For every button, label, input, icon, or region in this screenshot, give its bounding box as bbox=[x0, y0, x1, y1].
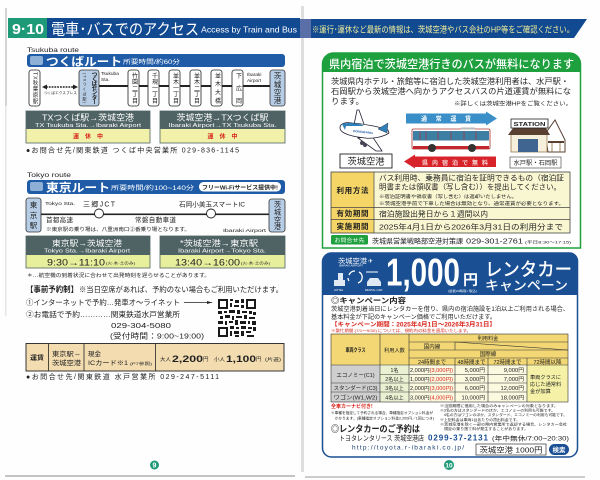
contact: airport office: (平日8:30～17:15) bbox=[525, 240, 572, 244]
header: left page title band bbox=[8, 18, 300, 38]
table: rental prices: 金が加算 bbox=[530, 387, 551, 395]
timetable panel: Tokyo to Ibaraki bbox=[26, 236, 150, 268]
fare table: 大人 bbox=[160, 356, 171, 363]
route diagram: 首都高速 bbox=[46, 215, 74, 224]
campaign banner: 1,000 bbox=[386, 252, 460, 294]
search box: 茨城空港 1000円 bbox=[480, 444, 542, 454]
reservation methods bbox=[26, 297, 212, 340]
panel frame and heading bbox=[322, 53, 581, 248]
reservation methods: ②お電話で予約…………関東鉄道水戸営業所 bbox=[26, 309, 181, 319]
header: left page title band: 電車･バスでのアクセス bbox=[51, 20, 199, 38]
route label: Tokyo route bbox=[27, 172, 71, 179]
campaign banner: レンタカー bbox=[485, 259, 572, 280]
route diagram: Airport bbox=[247, 78, 262, 84]
campaign banner: (最低24時間 / 税込) bbox=[448, 289, 477, 293]
header: left page title band: 9·10 bbox=[12, 21, 44, 38]
table: usage details: 宿泊施設出発日から１週間以内 bbox=[379, 210, 488, 218]
table: rental prices: 4名以上 bbox=[385, 394, 404, 402]
campaign banner: キャンペーン bbox=[485, 278, 568, 293]
table: rental prices: 車両クラス bbox=[346, 346, 366, 354]
timetable panel: Tokyo to Ibaraki: Tokyo Sta.→Ibaraki Airport bbox=[44, 248, 131, 254]
timetable panel: Ibaraki to TX Tsukuba: 運 休 中 bbox=[207, 132, 238, 140]
route diagram: 並木二丁目 bbox=[192, 72, 200, 105]
reservation methods: 029-304-5080 bbox=[111, 321, 171, 330]
section: Tokyo route bbox=[26, 172, 285, 381]
description text bbox=[331, 76, 572, 108]
search box: 検索 bbox=[552, 445, 566, 454]
timetable panel: Tokyo to Ibaraki: 9:30→11:10 bbox=[47, 258, 105, 268]
timetable panel: TX Tsukuba to Ibaraki: TXつくば駅→茨城空港 bbox=[42, 112, 135, 122]
campaign details text bbox=[331, 295, 569, 333]
route diagram: 千現一丁目 bbox=[150, 72, 158, 105]
page number 10: 10 bbox=[445, 462, 453, 470]
route title bar: 所要時間/約100~140分 bbox=[111, 184, 194, 192]
route diagram: つくばエクスプレス bbox=[44, 90, 78, 95]
timetable panel: Tokyo to Ibaraki: 東京駅→茨城空港 bbox=[52, 238, 122, 248]
route diagram: Ibaraki bbox=[247, 72, 261, 78]
timetable panel: Tokyo to Ibaraki: (火·木·土のみ) bbox=[106, 260, 136, 266]
panel frame and heading: 県内宿泊で茨城空港行きのバスが無料になります bbox=[329, 57, 574, 71]
table: rental prices: 2名以上 bbox=[385, 375, 404, 383]
route diagram: ※東京駅の乗り場は、八重洲南口②番乗り場となります。 bbox=[46, 226, 190, 233]
route diagram: 竹園二丁目 bbox=[130, 72, 138, 105]
fare table: ICカード※1 bbox=[88, 359, 128, 367]
table: rental prices: 10,000円 bbox=[461, 394, 485, 402]
table: rental prices: 国際線 bbox=[480, 350, 497, 358]
route diagram: 並木一丁目 bbox=[172, 72, 178, 105]
route diagram bbox=[29, 70, 285, 106]
timetable panel: TX Tsukuba to Ibaraki bbox=[26, 111, 150, 143]
table: usage details: 有効期間 bbox=[336, 208, 368, 218]
fare table: (片道) bbox=[265, 356, 282, 363]
table: rental prices: 9,000円 bbox=[504, 367, 524, 374]
table: rental prices: 3,000円 bbox=[465, 376, 485, 383]
table: rental prices: 応じた通常料 bbox=[530, 380, 561, 388]
fare table: 現金 bbox=[88, 349, 102, 358]
reservation methods: ①インターネットで予約…発車オ～ライネット bbox=[26, 297, 180, 307]
arrow: free with overnight stay: 県内宿泊で無料 bbox=[422, 159, 488, 167]
campaign banner bbox=[322, 252, 578, 295]
contact: Tokyo: ●お問合せ先/関東鉄道 水戸営業所 029-247-5111 bbox=[26, 372, 219, 381]
table: rental prices: 72時間まで bbox=[493, 358, 522, 366]
table: usage details: 2025年4月1日から2026年3月31日の利用分まで bbox=[379, 222, 563, 232]
campaign banner: RENTAL CAR bbox=[365, 288, 382, 292]
table: rental prices: 48時間まで bbox=[457, 358, 486, 366]
timetable panel: Ibaraki to Tokyo: (火·木·土のみ) bbox=[241, 260, 271, 266]
label: Ibaraki Airport: 茨城空港 bbox=[348, 156, 384, 166]
timetable panel: Ibaraki to Tokyo: 13:40→16:00 bbox=[175, 258, 240, 268]
campaign conditions bbox=[440, 403, 567, 431]
panel frame bbox=[322, 253, 578, 457]
table: rental prices: 5,000円 bbox=[465, 367, 485, 374]
table: usage details: ※茨城空港手前で下車した場合は無効となり、通常運賃が必要となります。 bbox=[379, 200, 564, 207]
label: Ibaraki Airport bbox=[340, 154, 392, 168]
navigation note: ※車種を指定して予約される場合、車種指定オプション料金が bbox=[331, 410, 433, 415]
table: rental prices: 利用料金 bbox=[478, 334, 499, 342]
campaign details text: 【キャンペーン期間：2025年4月1日～2026年3月31日】 bbox=[331, 320, 496, 328]
timetable panel: Ibaraki to Tokyo: *茨城空港→東京駅 bbox=[180, 238, 258, 248]
timetable panel: Ibaraki to Tokyo bbox=[160, 236, 285, 268]
route diagram: Tokyo Sta. bbox=[45, 201, 75, 206]
route diagram: 茨城空港 bbox=[273, 71, 282, 104]
note: departure delay: ＊…航空機の到着状況に合わせて出発時刻を遅らせることがあります。 bbox=[27, 272, 210, 279]
fare table: 東京駅⇔ bbox=[52, 349, 81, 358]
fare table: 円 bbox=[203, 356, 209, 363]
panel: rental car campaign bbox=[322, 252, 578, 457]
campaign conditions: ※上記料金は車両1台あたりの貸出料金です。 bbox=[440, 417, 520, 422]
rental contact: 0299-37-2131 bbox=[428, 434, 489, 442]
fare table: 運賃 bbox=[30, 354, 44, 362]
panel: free bus for overnight guests bbox=[322, 53, 581, 248]
campaign banner: 円 bbox=[463, 273, 478, 289]
table: rental prices: 車両クラスに bbox=[530, 373, 561, 381]
label: Mito and Ishioka stations: 水戸駅・石岡駅 bbox=[514, 159, 558, 167]
table: rental prices: ワゴン(W1,W2) bbox=[334, 394, 378, 402]
campaign details text: ◎キャンペーン内容 bbox=[331, 295, 407, 305]
campaign details text: 茨城空港到着当日にレンタカーを借り、県内の宿泊施設を1泊以上ご利用される場合、 bbox=[331, 305, 569, 313]
timetable panel: TX Tsukuba to Ibaraki: TX Tsukuba Sta.→Ibaraki Airport bbox=[35, 123, 142, 129]
route diagram: Ibaraki Airport bbox=[223, 228, 267, 234]
campaign details text: 基本料金が下記のキャンペーン価格でご利用いただけます。 bbox=[331, 313, 496, 321]
navigation note: 全車カーナビ付き! bbox=[331, 403, 373, 410]
header: left page title band: Access by Train and Bus bbox=[201, 24, 297, 34]
campaign banner: HOTEL bbox=[334, 288, 344, 292]
table: rental prices: 3名以上 bbox=[385, 384, 404, 392]
section: Tsukuba route bbox=[26, 47, 285, 154]
route diagram: Tsukuba bbox=[101, 71, 119, 77]
table: rental prices: 2,000円 (3,000円) bbox=[410, 367, 453, 374]
arrow: regular fare: 通 常 運 賃 bbox=[421, 115, 471, 123]
description text: ります。 bbox=[331, 97, 364, 106]
campaign conditions: ※当該期間に借用した場合のみキャンペーンの対象となります。 bbox=[440, 403, 558, 408]
campaign conditions: 規定の乗り捨て料が発生することがあります。 bbox=[440, 426, 528, 431]
table: rental prices: 12,000円 bbox=[500, 385, 524, 392]
campaign details text: ※繁忙期間 (7/1～9/30) については、規約内の料金を適用いたします。 bbox=[331, 328, 471, 333]
route diagram: つくばセンター bbox=[90, 72, 97, 104]
route diagram: 三郷JCT bbox=[83, 200, 116, 208]
reservation methods: (受付時間：9:00~19:00) bbox=[110, 330, 205, 340]
page number 9: 9 bbox=[153, 462, 157, 470]
rental contact: (年中無休/7:00~20:30) bbox=[492, 434, 569, 442]
table: usage details: 利用方法 bbox=[336, 185, 369, 195]
icon: station building: STATION bbox=[514, 122, 546, 128]
contact: airport office: お問合せ先 bbox=[334, 237, 364, 244]
route diagram: 並木大橋 bbox=[214, 72, 220, 105]
fare table bbox=[26, 344, 284, 371]
campaign conditions: ※茨城空港を除く一部の県内営業所で返却する場合、レンタカー会社 bbox=[440, 422, 567, 426]
fare table: 2,200 bbox=[172, 354, 203, 364]
table: rental prices: スタンダード(C3) bbox=[334, 384, 378, 392]
table: rental prices: 6,000円 bbox=[465, 385, 485, 392]
table: rental prices bbox=[331, 334, 568, 403]
fare table: 小人 bbox=[214, 356, 225, 363]
reservation heading: 【事前予約制】 bbox=[26, 284, 78, 294]
contact: airport office: 茨城県営業戦略部空港対策課 bbox=[372, 236, 463, 246]
QR code bbox=[218, 298, 256, 338]
route diagram: 下広岡 bbox=[234, 72, 242, 105]
table: usage details: 実施期間 bbox=[336, 221, 368, 231]
campaign conditions: ※3名の方はスタンダードのほか、エコノミーの利用も可能です。 bbox=[440, 408, 555, 412]
table: rental prices: 1,000円 (2,000円) bbox=[410, 376, 453, 383]
campaign banner: ✈ bbox=[368, 258, 373, 265]
page number 9 bbox=[150, 460, 159, 470]
fare table: 円 bbox=[256, 356, 262, 363]
contact: Tsukuba: ●お問合せ先/関東鉄道 つくば中央営業所 029-836-1145 bbox=[26, 146, 239, 154]
route diagram bbox=[26, 198, 285, 234]
table: rental prices: 利用人数 bbox=[384, 346, 406, 354]
arrow: regular fare bbox=[406, 112, 497, 126]
route title bar bbox=[27, 54, 285, 68]
rental contact bbox=[339, 434, 569, 452]
route diagram: 石岡小美玉スマートIC bbox=[179, 200, 245, 208]
route diagram: 茨城空港 bbox=[274, 200, 281, 230]
table: rental prices: 3,000円 (4,000円) bbox=[410, 394, 453, 402]
description text: 茨城県内ホテル・旅館等に宿泊した茨城空港利用者は、水戸駅・ bbox=[331, 76, 569, 86]
table: usage details: バス利用時、乗務員に宿泊を証明できるもの（宿泊証 bbox=[379, 174, 565, 182]
reservation heading: ※当日空席があれば、予約のない場合もご利用いただけます。 bbox=[79, 284, 283, 294]
timetable panel: Ibaraki to Tokyo: Ibaraki Airport→Tokyo Sta. bbox=[178, 248, 266, 254]
fare table: 茨城空港 bbox=[52, 358, 82, 367]
label: Mito and Ishioka stations bbox=[510, 157, 561, 168]
route diagram: TX秋葉原駅 bbox=[32, 72, 38, 105]
campaign banner: 茨城空港 bbox=[338, 256, 368, 265]
icon: airplane: DONGBANG bbox=[353, 129, 374, 135]
table: rental prices: 72時間以降 bbox=[533, 358, 562, 366]
route title bar bbox=[27, 180, 285, 194]
route diagram: (TXつくば駅) bbox=[82, 73, 88, 104]
route diagram: 常磐自動車道 bbox=[135, 215, 176, 224]
timetable panel: Ibaraki to TX Tsukuba: Ibaraki Airport→TX Tsukuba Sta. bbox=[168, 123, 276, 129]
description text: 石岡駅から茨城空港へ向かうアクセスバスの片道運賃が無料にな bbox=[331, 86, 571, 96]
campaign banner: IBARAKI AIRPORT bbox=[339, 264, 364, 268]
table: rental prices: 1名 bbox=[390, 366, 399, 374]
icon: station building bbox=[508, 119, 565, 152]
route label: Tsukuba route bbox=[27, 47, 79, 54]
contact: airport office: 029-301-2761 bbox=[466, 236, 523, 246]
route title bar: 東京ルート bbox=[46, 180, 110, 194]
table: rental prices: 2,000円 (3,000円) bbox=[410, 385, 453, 392]
arrow: free with overnight stay bbox=[404, 154, 496, 168]
navigation note: かかります。(車種指定オプション料金2,200円／1回につき) bbox=[331, 416, 434, 420]
contact: airport office bbox=[331, 235, 572, 246]
icon: airplane bbox=[340, 110, 389, 151]
table: rental prices: 国内線 bbox=[424, 342, 441, 350]
route title bar: 所要時間/約60分 bbox=[123, 58, 180, 66]
description text: ※詳しくは茨城空港HPをご覧ください。 bbox=[454, 100, 572, 108]
table: rental prices: 18,000円 bbox=[500, 394, 524, 402]
route title bar: つくばルート bbox=[46, 54, 122, 68]
table: rental prices: エコノミー(C1) bbox=[336, 372, 375, 379]
timetable panel: TX Tsukuba to Ibaraki: 運 休 中 bbox=[73, 132, 103, 140]
icon: bus bbox=[412, 128, 490, 152]
fare table: (P7参照) bbox=[130, 361, 153, 366]
rental contact: http://toyota.r-ibaraki.co.jp/ bbox=[352, 444, 464, 452]
table: rental prices: 7,000円 bbox=[504, 376, 524, 383]
navigation note bbox=[331, 403, 434, 420]
campaign conditions: 4名の方はワゴンのほか、スタンダード、エコノミーの利用も可能です。 bbox=[440, 412, 567, 417]
table: usage details bbox=[331, 172, 570, 233]
search box bbox=[476, 444, 569, 455]
page number 10 bbox=[444, 460, 454, 470]
fare table: 1,100 bbox=[226, 354, 256, 364]
route diagram: Sta. bbox=[101, 77, 110, 83]
table: usage details: 明書または領収書（写し含む））を提出してください。 bbox=[379, 182, 561, 192]
table: usage details: ※宿泊証明書や領収書（写し含む）は返却いたしません。 bbox=[379, 193, 517, 200]
table: rental prices: 24時間まで bbox=[418, 358, 447, 366]
reservation heading: ◎レンタカーのご予約は bbox=[331, 423, 420, 434]
route diagram: 東京駅 bbox=[29, 200, 38, 230]
timetable panel: Ibaraki to TX Tsukuba: 茨城空港→TXつくば駅 bbox=[176, 112, 269, 122]
route title bar: フリーWi-Fiサービス提供中! bbox=[202, 183, 278, 191]
timetable panel: Ibaraki to TX Tsukuba bbox=[160, 111, 285, 143]
header: right page notice band bbox=[300, 19, 587, 38]
rental contact: トヨタレンタリース 茨城空港店 bbox=[339, 434, 424, 442]
